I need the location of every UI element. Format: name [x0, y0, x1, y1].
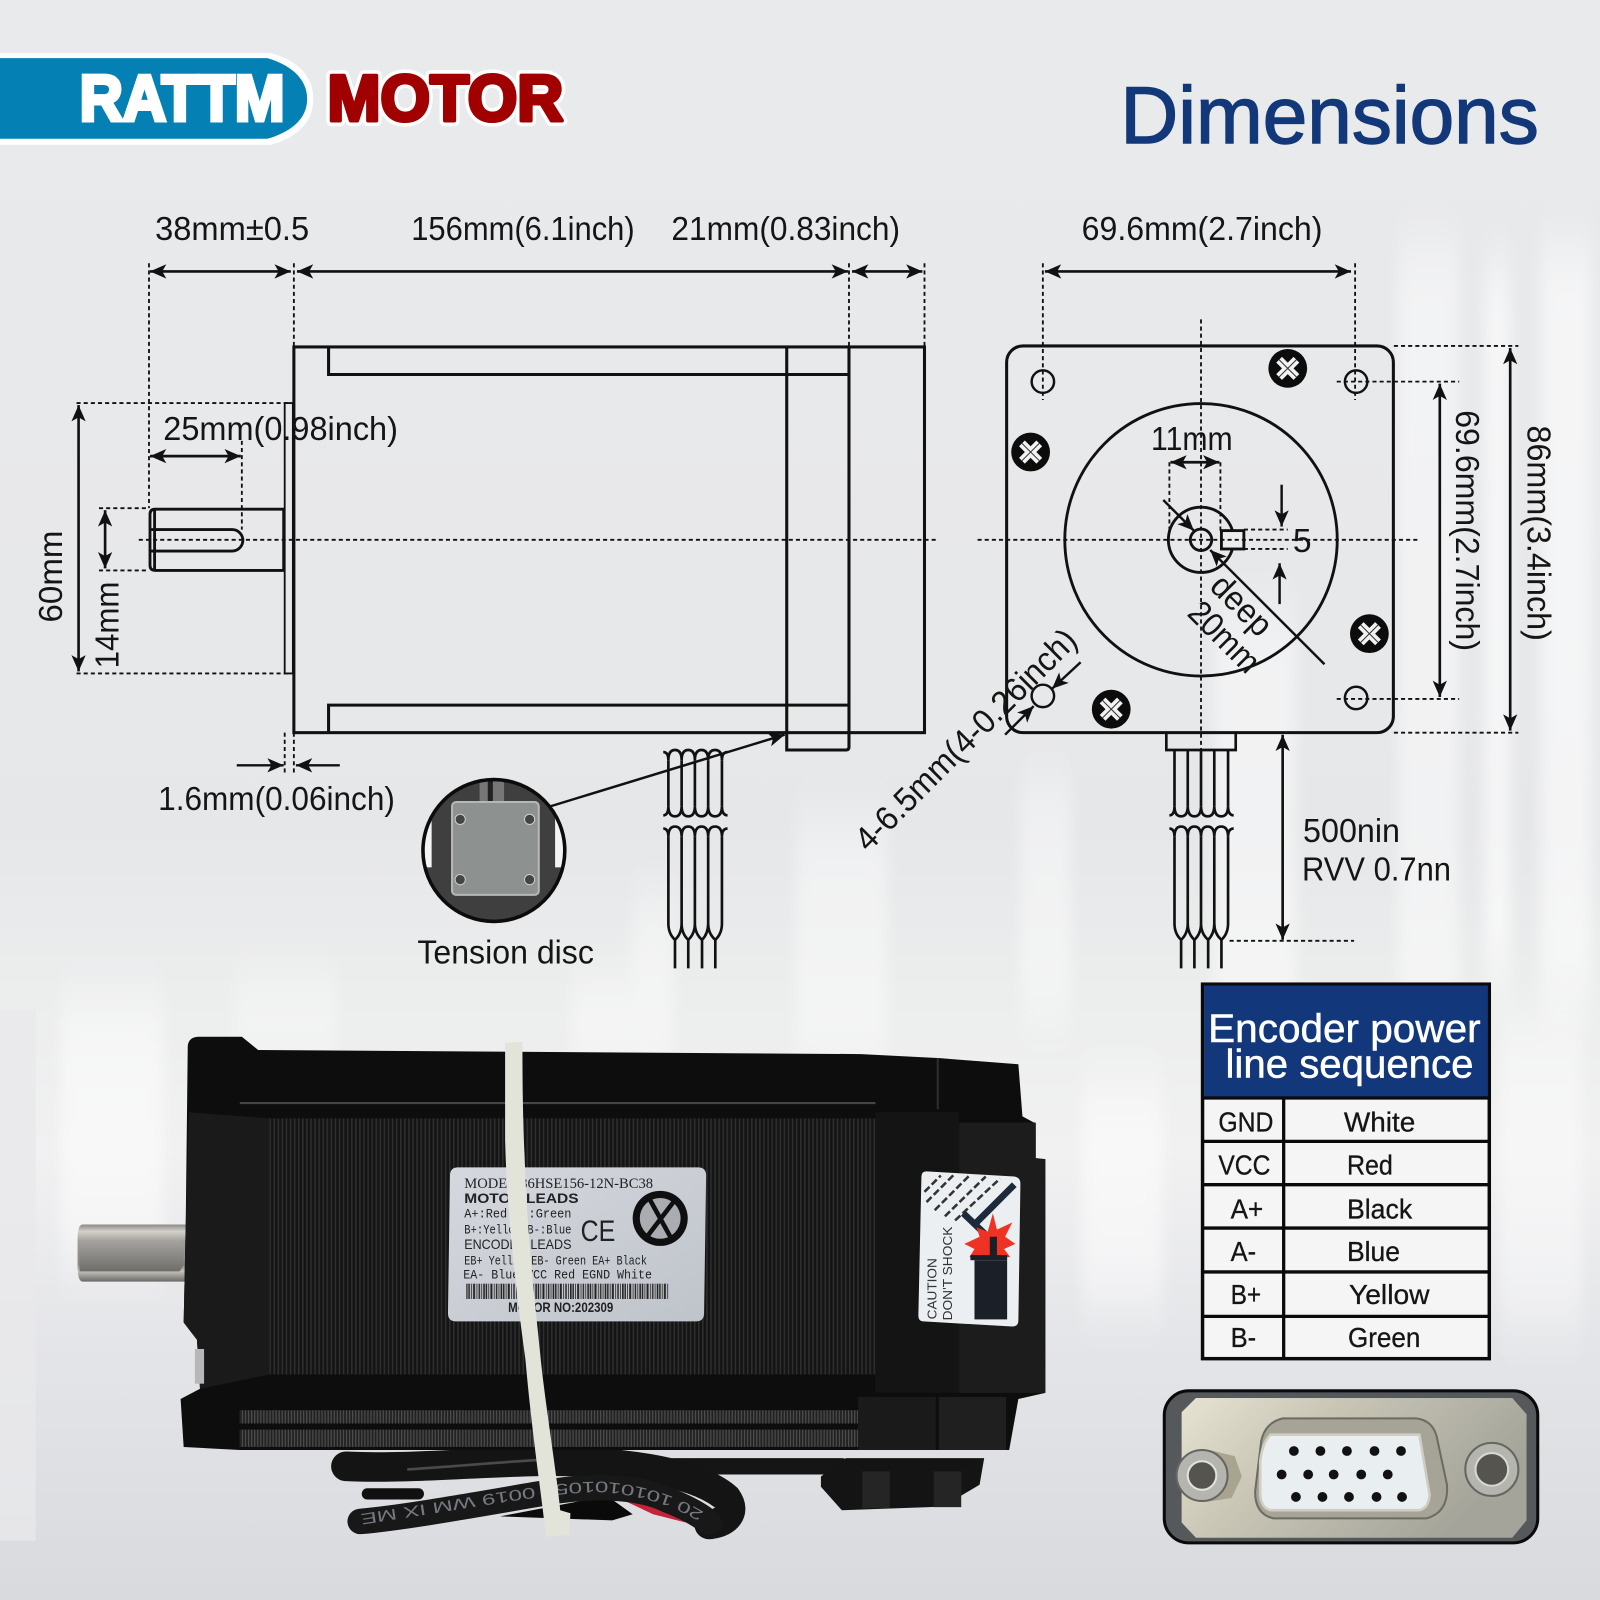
screw 3	[1342, 606, 1397, 661]
tension disc inset photo	[418, 776, 571, 929]
row B-: B-	[1231, 1322, 1256, 1353]
arrows key width	[1280, 485, 1282, 604]
arrows deep	[1163, 500, 1324, 664]
header line 2: line sequence	[1226, 1042, 1473, 1087]
row A+: A+	[1231, 1193, 1263, 1224]
front plate outline	[1007, 346, 1393, 733]
arrow 69.6 height	[1438, 384, 1441, 697]
row B-: Green	[1348, 1322, 1420, 1353]
side view dimension drawing	[33, 211, 939, 971]
top dimension arrows	[150, 270, 922, 273]
row B+	[1231, 1279, 1430, 1310]
brand circle icon	[633, 1191, 688, 1246]
arrow 14mm	[104, 510, 106, 568]
row B+: Yellow	[1349, 1279, 1430, 1310]
motor connector plug	[821, 1458, 984, 1510]
screw 2	[1003, 425, 1058, 479]
label deep: deep	[1203, 568, 1279, 644]
row A+	[1231, 1193, 1412, 1224]
label 25mm: 25mm(0.98inch)	[163, 411, 398, 448]
label 21mm: 21mm(0.83inch)	[671, 211, 900, 248]
red burst	[964, 1213, 1015, 1257]
row GND	[1218, 1107, 1415, 1138]
label 38mm: 38mm±0.5	[155, 211, 309, 248]
right hex standoff	[1465, 1443, 1518, 1496]
logo word MOTOR: MOTOR	[328, 61, 563, 134]
barcode	[466, 1284, 668, 1299]
left hex standoff	[1177, 1450, 1242, 1502]
CE mark: CE	[581, 1215, 615, 1248]
motor leads heading: MOTOR LEADS	[464, 1191, 579, 1206]
caution text: CAUTION	[925, 1258, 940, 1319]
label hole diameter: 4-6.5mm(4-0.26inch)	[848, 622, 1085, 859]
inner wires wedge	[500, 1496, 633, 1520]
row B+: B+	[1231, 1279, 1261, 1310]
label cable spec: RVV 0.7nn	[1302, 852, 1451, 889]
row A-	[1231, 1236, 1400, 1267]
logo badge	[0, 53, 313, 145]
model line: MODEL:86HSE156-12N-BC38	[464, 1176, 653, 1192]
label 5: 5	[1293, 523, 1312, 560]
hatch marks	[924, 1173, 1000, 1220]
logo word MOTOR: MOTOR	[328, 61, 563, 134]
motor lead A: A+:Red A-:Green	[464, 1206, 571, 1221]
label 86mm: 86mm(3.4inch)	[1520, 426, 1557, 641]
rotor circles	[1065, 404, 1337, 676]
motor number: MOTOR NO:202309	[508, 1300, 614, 1315]
arrow 69.6 width	[1045, 270, 1351, 273]
encoder line 1: EB+ Yellow EB- Green EA+ Black	[464, 1253, 647, 1268]
cable loop top	[346, 1461, 731, 1524]
plug icon	[970, 1237, 1007, 1319]
nameplate label	[448, 1167, 706, 1321]
arrows 1.6mm	[237, 764, 340, 767]
cable to connector	[673, 1458, 842, 1474]
label 11mm: 11mm	[1151, 421, 1233, 458]
D-sub insert with pin holes	[1260, 1435, 1430, 1510]
hammer	[963, 1185, 1014, 1234]
table body	[1203, 984, 1489, 1359]
row GND: GND	[1218, 1107, 1273, 1138]
header line 1: Encoder power	[1208, 1006, 1481, 1051]
tension disc callout arrow	[551, 735, 785, 806]
flange face	[184, 1112, 269, 1389]
front view dimension drawing	[848, 211, 1557, 968]
tension disc label: Tension disc	[417, 934, 594, 971]
cable tie	[505, 1042, 570, 1537]
label 69.6 height: 69.6mm(2.7inch)	[1448, 410, 1485, 651]
arrows hole diameter	[1005, 662, 1081, 735]
photo: servo motor	[78, 1036, 1046, 1540]
label lead length: 500nin	[1303, 813, 1400, 850]
row A-: Blue	[1347, 1236, 1400, 1267]
row A-: A-	[1231, 1236, 1256, 1267]
connector box and wire bundle	[1166, 733, 1236, 968]
arrow lead length	[1281, 735, 1284, 940]
motor lead B: B+:Yellow B-:Blue	[464, 1223, 571, 1238]
label 60mm: 60mm	[33, 531, 70, 622]
don't shock text: DON'T SHOCK	[940, 1226, 955, 1320]
row VCC	[1218, 1149, 1393, 1180]
arrow 25mm	[150, 455, 241, 457]
encoder line 2: EA- Blue VCC Red EGND White	[463, 1268, 652, 1283]
encoder housing	[876, 1058, 1045, 1393]
label 1.6mm: 1.6mm(0.06inch)	[158, 781, 395, 818]
row A+: Black	[1347, 1193, 1412, 1224]
cable stub	[367, 1488, 418, 1499]
title: Dimensions	[1120, 71, 1539, 161]
row GND: White	[1344, 1107, 1415, 1138]
label 20mm: 20mm	[1180, 594, 1267, 681]
screw 1	[1260, 341, 1315, 396]
table: encoder power line sequence	[1202, 984, 1490, 1359]
cables	[331, 1450, 846, 1540]
label 69.6 width: 69.6mm(2.7inch)	[1082, 211, 1322, 248]
upper channel ridge	[240, 1102, 876, 1104]
label 14mm: 14mm	[89, 582, 126, 668]
row VCC: VCC	[1218, 1149, 1270, 1180]
table header	[1204, 986, 1488, 1097]
label 156mm: 156mm(6.1inch)	[411, 211, 635, 248]
encoder leads heading: ENCODER LEADS	[464, 1237, 571, 1252]
wire bundle left	[663, 750, 728, 968]
arrow 86mm	[1509, 348, 1512, 731]
screw on flange	[195, 1349, 204, 1384]
screw 4	[1084, 682, 1139, 737]
row B-	[1231, 1322, 1420, 1353]
mounting holes	[1032, 370, 1367, 709]
rear end caps	[858, 1397, 1006, 1450]
logo word RATTM: RATTM	[80, 61, 285, 134]
row VCC: Red	[1347, 1149, 1393, 1180]
cable loop bottom	[360, 1488, 709, 1522]
cable print: 20 1010101050 0019 WM IX ME	[361, 1482, 704, 1524]
cable highlight	[408, 1459, 552, 1469]
arrow 11mm	[1170, 461, 1219, 464]
stator fins	[269, 1118, 876, 1374]
lower channel strips	[240, 1410, 858, 1447]
logo: RATTM MOTOR	[0, 53, 563, 145]
arrow 60mm	[77, 405, 80, 671]
motor side outline	[150, 347, 924, 750]
D-sub shell	[1255, 1418, 1447, 1518]
photo: DB15 encoder connector	[1164, 1391, 1538, 1543]
caution sticker	[918, 1171, 1020, 1327]
output shaft	[78, 1224, 186, 1282]
red wire	[612, 1495, 686, 1522]
motor silhouette	[181, 1037, 1045, 1450]
